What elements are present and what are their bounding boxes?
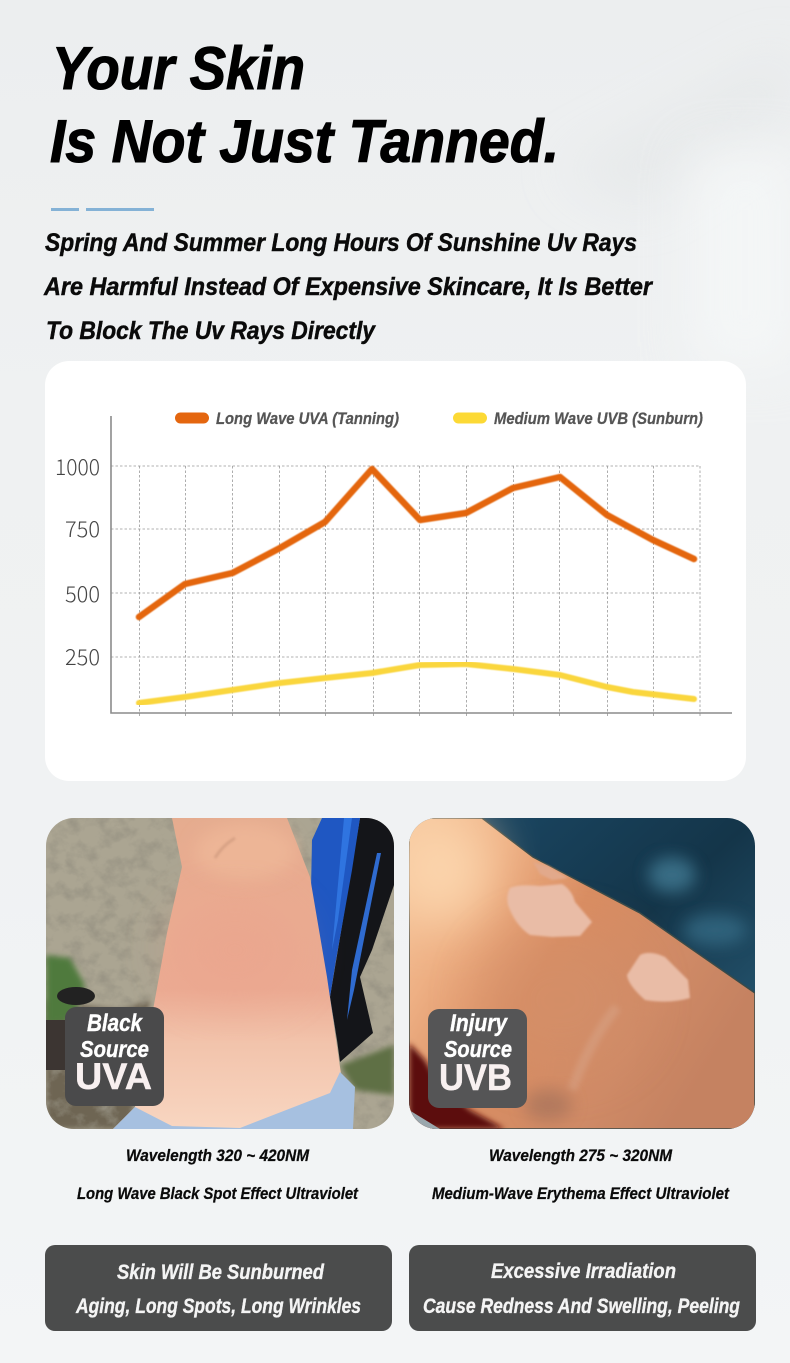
captions: UVB: Wavelength 275 ~ 320NM <box>489 1146 673 1165</box>
captions: UVA: Long Wave Black Spot Effect Ultraviolet <box>77 1184 359 1203</box>
intro text: To Block The Uv Rays Directly <box>46 317 376 345</box>
chart legend <box>175 409 703 428</box>
intro text: Are Harmful Instead Of Expensive Skincare, It Is Better <box>43 273 653 301</box>
captions: UVA <box>77 1146 359 1203</box>
title: Your Skin <box>52 35 305 102</box>
line: UVB <box>139 664 694 703</box>
chart grid <box>111 466 700 717</box>
intro text: Spring And Summer Long Hours Of Sunshine Uv Rays <box>45 229 637 257</box>
badge: Injury Source UVB <box>428 1009 527 1108</box>
y axis labels: 250 <box>65 640 100 672</box>
accent dashes <box>51 208 154 211</box>
captions: UVA: Wavelength 320 ~ 420NM <box>126 1146 310 1165</box>
badge: Injury Source UVB: Injury <box>450 1010 508 1037</box>
chart legend: Long Wave UVA (Tanning) <box>216 409 399 428</box>
badge: Black Source UVA <box>65 1007 164 1106</box>
peeling skin patches <box>507 862 690 1002</box>
badge: Black Source UVA: UVA <box>75 1056 152 1097</box>
panel: line chart card <box>45 361 746 781</box>
badge: Injury Source UVB: UVB <box>439 1057 512 1098</box>
chart legend: Medium Wave UVB (Sunburn) <box>494 409 703 428</box>
captions: UVB: Medium-Wave Erythema Effect Ultraviolet <box>432 1184 730 1203</box>
callout: UVA effects: Skin Will Be Sunburned <box>117 1261 325 1284</box>
callout: UVB effects: Excessive Irradiation <box>491 1260 676 1283</box>
callout: UVA effects: Aging, Long Spots, Long Wrinkles <box>75 1295 361 1318</box>
line: UVA <box>139 469 694 617</box>
chart axes <box>111 416 732 713</box>
y axis labels: 1000 <box>55 450 100 482</box>
badge: Black Source UVA: Source <box>80 1036 149 1062</box>
badge: Black Source UVA: Black <box>87 1010 143 1037</box>
badge: Injury Source UVB: Source <box>444 1036 512 1062</box>
y axis labels: 500 <box>65 577 100 609</box>
title: Is Not Just Tanned. <box>50 108 559 175</box>
callout: UVB effects <box>409 1245 756 1331</box>
intro text <box>43 229 653 345</box>
y axis labels <box>55 450 100 672</box>
y axis labels: 750 <box>65 512 100 544</box>
callout: UVA effects <box>45 1245 392 1331</box>
photo: sunburned thigh (UVA) <box>46 818 394 1129</box>
title <box>50 35 559 175</box>
photo: peeling arm (UVB) <box>390 815 755 1129</box>
captions: UVB <box>432 1146 730 1203</box>
